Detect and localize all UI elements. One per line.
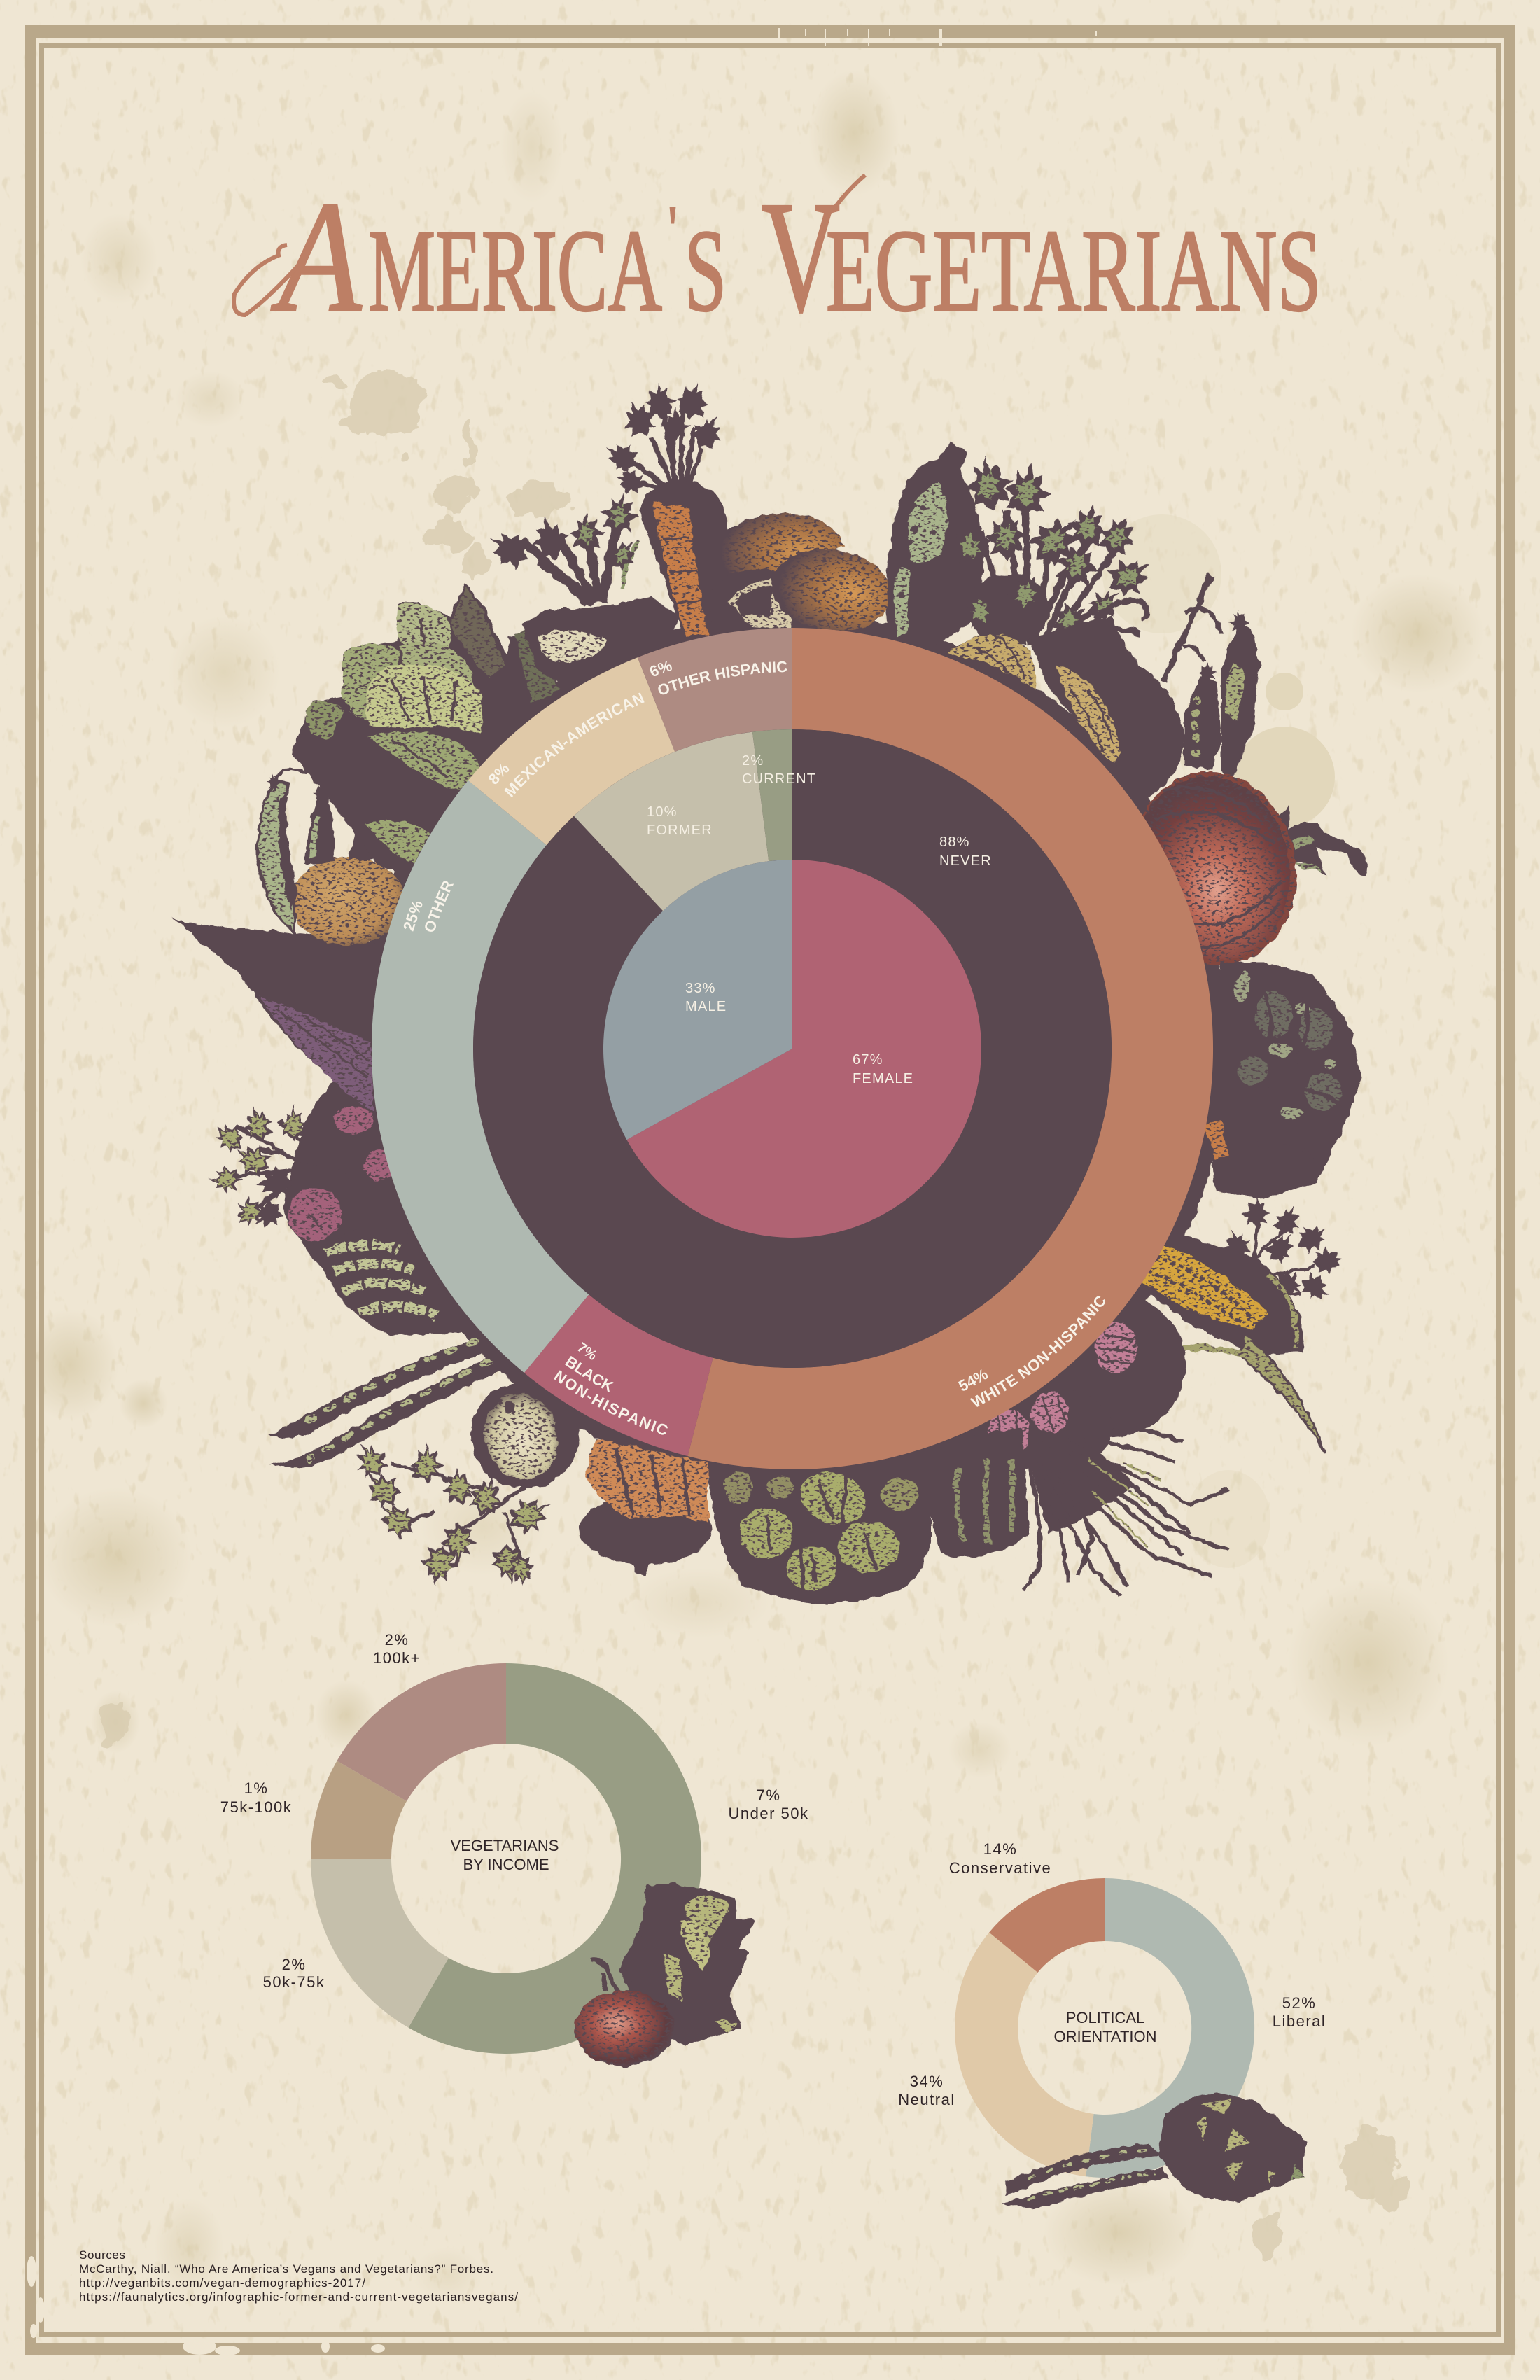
label: liberal: 52% [1282,1994,1316,2012]
label: other: OTHER [425,881,454,932]
label: female [853,1052,913,1086]
outer ring: ethnicity [372,628,1213,1469]
icon: mushroom cap [707,513,844,634]
label: current: CURRENT [742,771,816,787]
label: neutral: 34% [910,2073,944,2090]
label: conservative: 14% [983,1840,1017,1858]
icon: parsley left [208,1103,315,1236]
label: black non-hispanic: BLACK [565,1355,615,1392]
icon: stringy roots [1024,1427,1228,1596]
label: current [742,753,816,787]
label: former [647,804,713,838]
label: former: 10% [647,804,678,820]
label: other hispanic: OTHER HISPANIC [658,661,787,694]
dark mass left side [289,1036,462,1309]
label: other hispanic [647,636,793,720]
icon: tomato with leaves [1115,756,1366,980]
label: male [685,981,727,1014]
label: 75k-100k: 1% [244,1779,268,1797]
label: black non-hispanic: 7% [578,1341,596,1359]
label: liberal [1273,1994,1326,2030]
label: other [403,881,454,932]
label: male: 33% [685,981,716,996]
title: S [685,206,727,336]
donut centre title [451,1837,559,1873]
dark mass with onion and turnip, upper right [946,616,1184,798]
icon: red onions [973,1292,1186,1470]
donut centre title: VEGETARIANS [451,1837,559,1854]
donut chart: vegetarians by income [220,1631,809,2054]
label: 100k+: 100k+ [373,1649,421,1667]
label: female: 67% [853,1052,883,1068]
icon: pea pods right [1163,575,1260,780]
donut centre title [1054,2009,1157,2045]
label: 50k-75k [263,1956,325,1991]
title: EGETARIANS [826,206,1322,336]
label: 100k+: 2% [385,1631,409,1648]
middle ring: vegetarian status [473,729,1112,1368]
icon: lettuce and tomato beside income donut [575,1885,752,2066]
title: V [762,169,840,345]
main sunburst chart [372,628,1213,1469]
icon: artichoke [1205,962,1362,1198]
vegetable wreath [173,379,1366,1604]
sources text block: McCarthy, Niall. “Who Are America’s Vegans and Vegetarians?” Forbes. [79,2262,493,2276]
label: white non-hispanic: 54% [958,1369,988,1391]
icon: eggplant [173,917,392,1116]
inner pie: gender [603,860,981,1238]
donut centre title: POLITICAL [1066,2009,1144,2026]
label: male: MALE [685,999,727,1014]
ink splatters [102,369,1405,2258]
icon: potato [290,857,405,945]
icon: parsley greens [945,452,1161,662]
icon: striped squash bottom [924,1428,1029,1557]
icon: bottom lettuce [707,1456,931,1604]
label: never: NEVER [939,853,992,869]
label: other hispanic: 6% [650,661,672,676]
label: 50k-75k: 50k-75k [263,1973,325,1991]
sources text block [79,2248,518,2304]
label: current: 2% [742,753,764,769]
title: MERICA [368,206,662,336]
label: black non-hispanic: NON-HISPANIC [554,1370,668,1435]
icon: parsley fronds right [1219,1196,1347,1306]
label: neutral: Neutral [898,2091,955,2108]
title [234,169,1322,345]
icon: corn [1135,1232,1325,1452]
donut centre title: BY INCOME [463,1856,550,1873]
label: conservative: Conservative [949,1859,1051,1877]
label: 75k-100k: 75k-100k [220,1798,292,1816]
label: under 50k [728,1786,809,1822]
title: A [271,169,362,345]
title: ' [668,194,677,263]
label: conservative [949,1840,1051,1877]
label: never [939,834,992,869]
icon: olive parsley, lower left [346,1436,559,1590]
label: neutral [898,2073,955,2108]
label: mexican-american: 8% [489,764,510,784]
label: under 50k: 7% [757,1786,780,1804]
icon: striped squash left [312,1225,462,1336]
label: other: 25% [403,902,423,931]
icon: chard and lettuce leaves [293,583,567,882]
icon: cucumber [887,441,983,644]
sources text block: Sources [79,2248,125,2262]
icon: white garlic [470,1382,580,1488]
icon: artichoke and beans beside political donut [1002,2093,1308,2208]
label: never: 88% [939,834,970,850]
label: 100k+ [373,1631,421,1667]
label: under 50k: Under 50k [728,1805,809,1822]
sources text block: https://faunalytics.org/infographic-former-and-current-vegetariansvegans/ [79,2290,518,2304]
label: former: FORMER [647,822,713,838]
icon: turnip with leaves [481,489,679,693]
icon: carrot with leafy top [599,379,731,638]
label: liberal: Liberal [1273,2012,1326,2030]
icon: radishes [284,1106,395,1245]
label: female: FEMALE [853,1071,913,1086]
icon: round potato mushroom [766,542,897,638]
icon: long green beans [269,1334,511,1468]
donut centre title: ORIENTATION [1054,2028,1157,2045]
donut chart: political orientation [898,1840,1326,2178]
sources text block: http://veganbits.com/vegan-demographics-2017/ [79,2276,365,2290]
label: mexican-american: MEXICAN-AMERICAN [504,693,645,797]
label: 75k-100k [220,1779,292,1816]
label: 50k-75k: 2% [282,1956,306,1973]
icon: pumpkin [579,1438,712,1576]
label: white non-hispanic: WHITE NON-HISPANIC [970,1296,1105,1407]
stain rings near tomato [1102,514,1335,1568]
icon: pea pods left [258,769,376,932]
label: black non-hispanic [554,1341,668,1435]
dark base behind ring [357,613,1228,1484]
